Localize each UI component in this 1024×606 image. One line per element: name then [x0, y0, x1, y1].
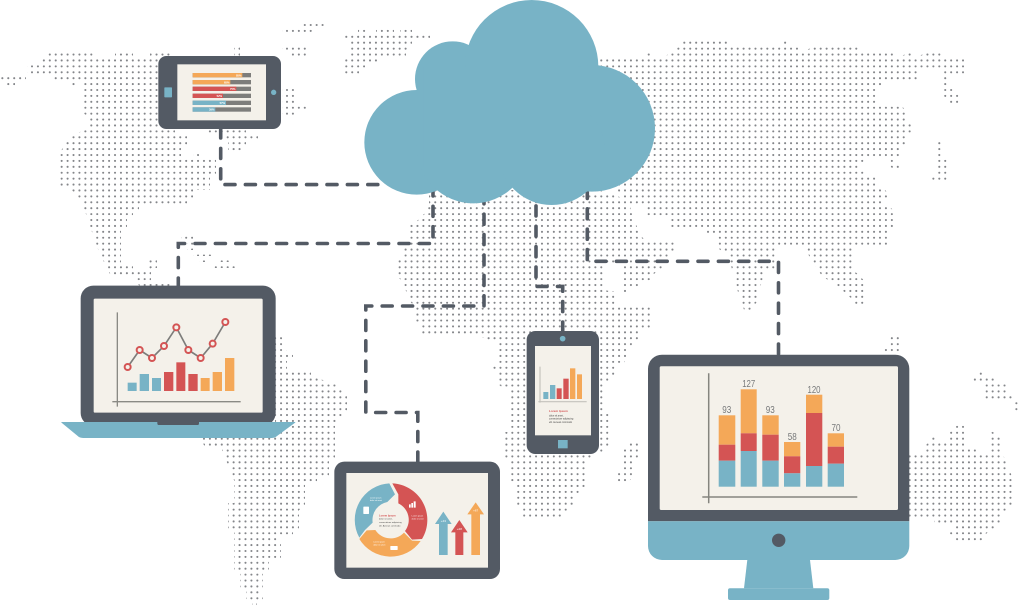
connector: top tablet to cloud	[221, 128, 378, 185]
donut cycle diagram: dolor sit amet	[373, 543, 386, 546]
device: laptop with line and bar chart	[62, 286, 295, 438]
growth arrows	[435, 502, 484, 555]
donut cycle diagram: dolor sit amet	[412, 517, 424, 520]
phone caption: Lorem Ipsum	[549, 409, 568, 413]
horizontal bar chart: 52%	[217, 94, 223, 98]
donut cycle diagram: dolor sit amet	[370, 499, 382, 502]
dashed network connectors	[178, 128, 779, 462]
device: bottom tablet with donut cycle and arrows	[334, 462, 500, 579]
donut cycle diagram: dolor sit amet,	[379, 518, 393, 521]
donut cycle diagram: elit. Aenean commodo	[379, 524, 401, 527]
device: phone with column chart	[527, 331, 599, 454]
stacked bar chart: 58	[788, 432, 797, 443]
donut cycle diagram: Lorem ipsum	[370, 496, 382, 499]
donut cycle diagram: Lorem ipsum	[412, 515, 423, 518]
connector: laptop to cloud	[178, 192, 433, 288]
horizontal bar chart: 75%	[230, 87, 236, 91]
connector: phone to cloud	[536, 198, 563, 332]
phone caption	[549, 409, 574, 424]
horizontal bar chart: 39%	[209, 108, 215, 112]
device: top tablet with progress bars	[158, 56, 281, 129]
connector: bottom tablet to cloud	[366, 198, 484, 462]
horizontal bar chart	[193, 73, 251, 112]
cloud	[364, 0, 655, 205]
horizontal bar chart: 57%	[220, 101, 226, 105]
phone caption: dolor sit amet,	[549, 414, 564, 417]
stacked bar chart: 93	[766, 405, 775, 416]
donut cycle diagram	[355, 483, 427, 557]
growth arrows: +67	[473, 509, 479, 513]
stacked bar chart	[702, 373, 857, 503]
donut cycle diagram: consectetuer adipiscing	[379, 521, 402, 524]
connector: monitor to cloud	[587, 190, 778, 354]
phone caption: consectetuer adipiscing	[549, 418, 574, 421]
phone chart	[538, 367, 587, 403]
stacked bar chart: 93	[722, 405, 732, 416]
donut cycle diagram: Lorem Ipsum	[379, 513, 396, 517]
horizontal bar chart: 65%	[224, 80, 230, 84]
stacked bar chart: 120	[808, 385, 821, 396]
growth arrows: +43	[441, 519, 446, 523]
phone caption: elit. Aenean commodo	[549, 421, 573, 424]
horizontal bar chart: 85%	[236, 73, 242, 77]
donut cycle diagram: Lorem ipsum	[373, 541, 385, 544]
chart axes	[112, 312, 241, 407]
line chart	[125, 319, 228, 370]
device: desktop monitor	[648, 355, 909, 600]
stacked bar chart: 70	[832, 423, 841, 434]
growth arrows: +28	[457, 527, 462, 531]
stacked bar chart: 127	[742, 379, 756, 390]
column chart	[128, 358, 234, 391]
